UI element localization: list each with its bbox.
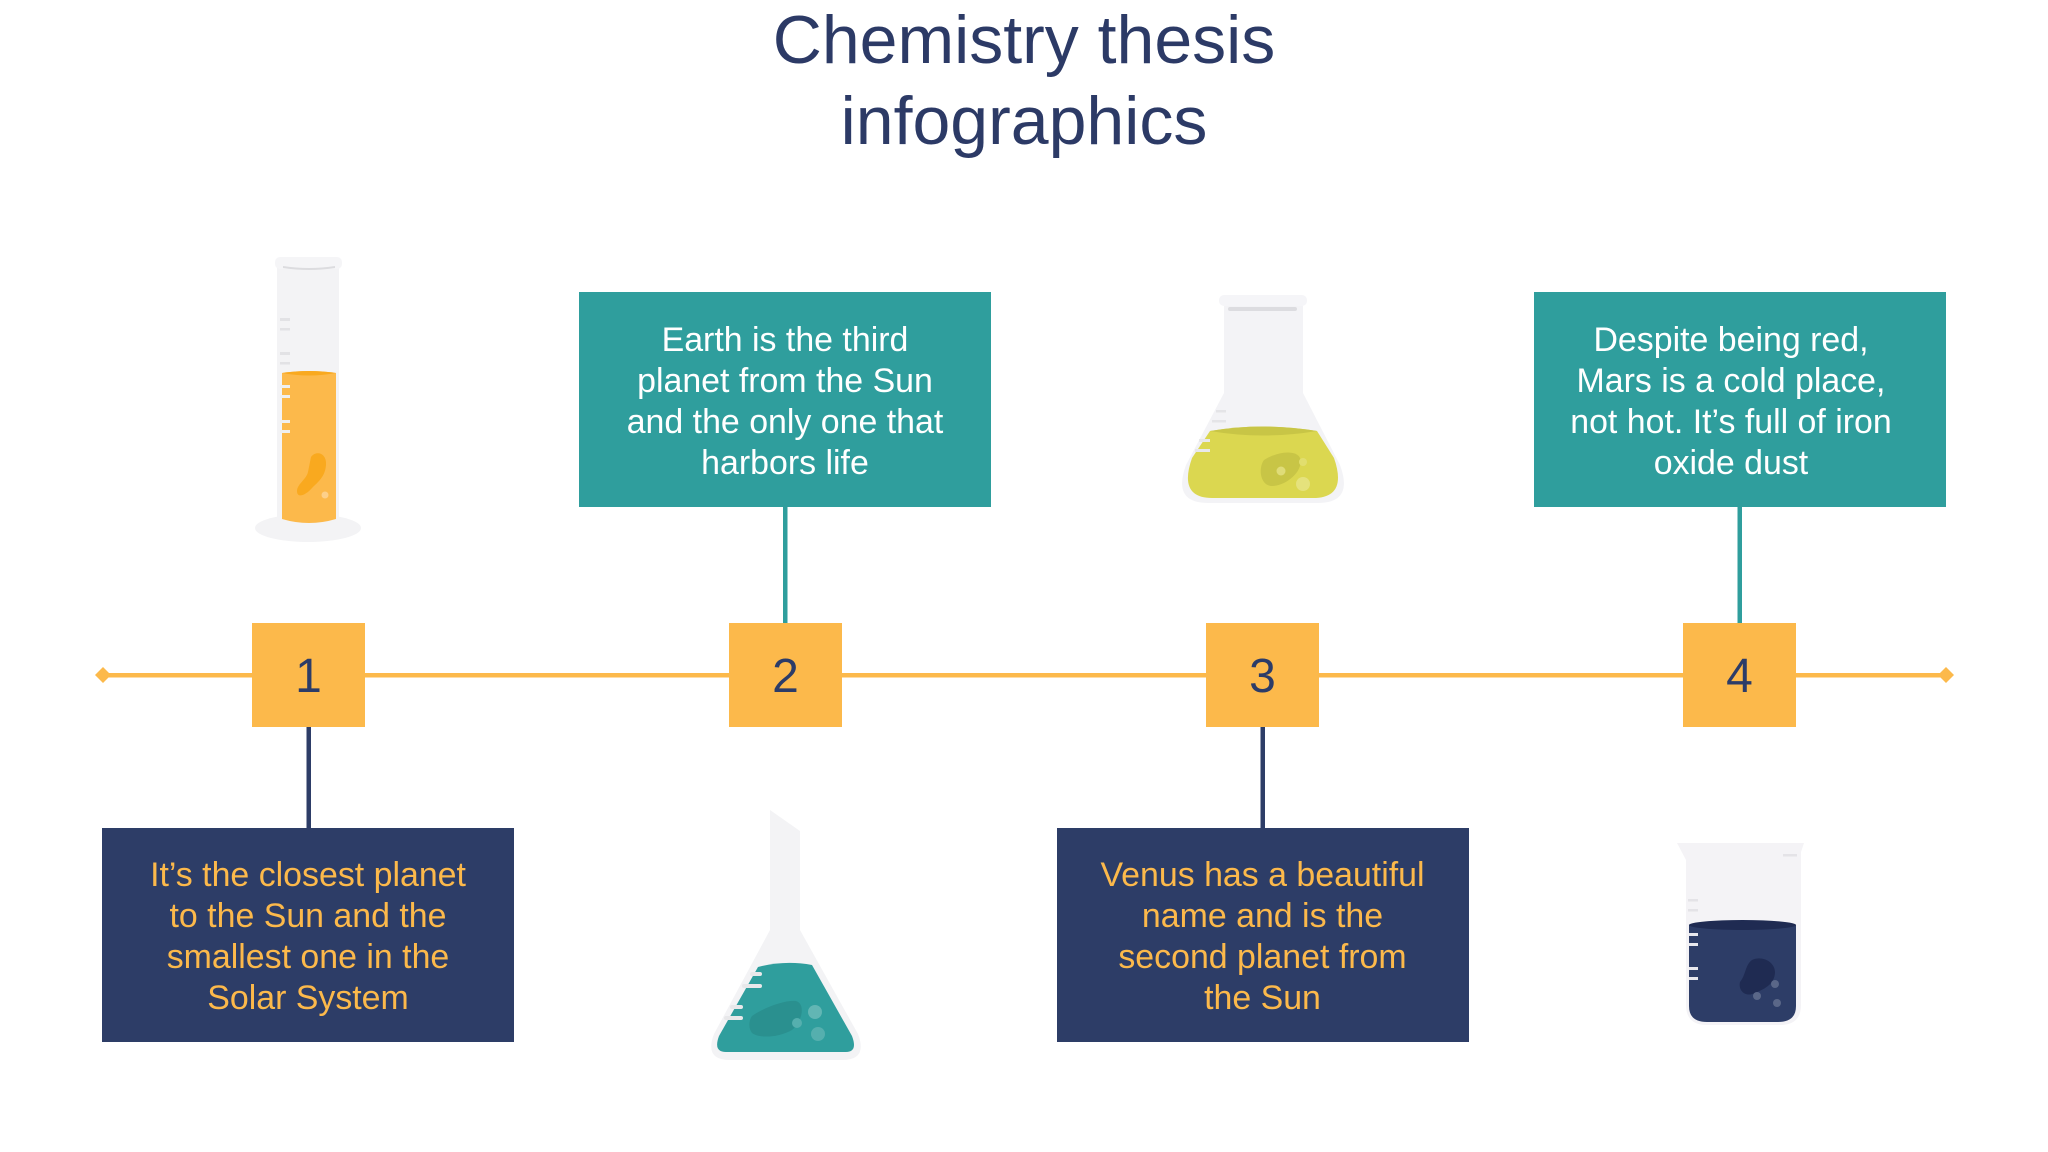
icon: graduated cylinder — [255, 257, 361, 542]
text box 4 — [1534, 292, 1946, 507]
step number 1: 1 — [295, 650, 322, 703]
text box 2: and the only one that — [627, 402, 943, 440]
text box 4: Despite being red, — [1593, 320, 1869, 358]
timeline line — [95, 667, 1954, 683]
connector 4 — [1738, 507, 1742, 623]
text box 1: It’s the closest planet — [150, 856, 466, 894]
text box 1 — [102, 828, 514, 1042]
step number 2: 2 — [772, 650, 799, 703]
text box 2: harbors life — [701, 444, 869, 482]
step number 1 — [252, 623, 365, 727]
text box 3: Venus has a beautiful — [1100, 856, 1425, 894]
icon: conical flask yellow — [1182, 295, 1344, 503]
text box 1: smallest one in the — [167, 938, 449, 976]
connector 1 — [306, 727, 311, 828]
text box 1: to the Sun and the — [170, 897, 446, 935]
step number 3: 3 — [1249, 650, 1276, 703]
step number 3 — [1206, 623, 1319, 727]
icon: beaker navy — [1677, 843, 1804, 1025]
text box 3: second planet from — [1118, 938, 1407, 976]
title: Chemistry thesis — [773, 2, 1275, 78]
title: infographics — [841, 83, 1207, 159]
text box 2: Earth is the third — [662, 320, 908, 358]
text box 1: Solar System — [207, 979, 409, 1017]
text box 3 — [1056, 828, 1468, 1042]
text box 4: not hot. It’s full of iron — [1570, 402, 1892, 440]
connector 3 — [1260, 727, 1265, 828]
icon: narrow-neck flask teal — [711, 810, 861, 1060]
step number 2 — [729, 623, 842, 727]
title — [773, 2, 1275, 159]
text box 2: planet from the Sun — [637, 362, 933, 400]
text box 3: name and is the — [1142, 897, 1383, 935]
text box 4: Mars is a cold place, — [1577, 362, 1885, 400]
text box 3: the Sun — [1204, 979, 1321, 1017]
text box 4: oxide dust — [1654, 444, 1808, 482]
text box 2 — [579, 292, 991, 507]
step number 4 — [1683, 623, 1796, 727]
step number 4: 4 — [1726, 650, 1753, 703]
connector 2 — [783, 507, 788, 623]
